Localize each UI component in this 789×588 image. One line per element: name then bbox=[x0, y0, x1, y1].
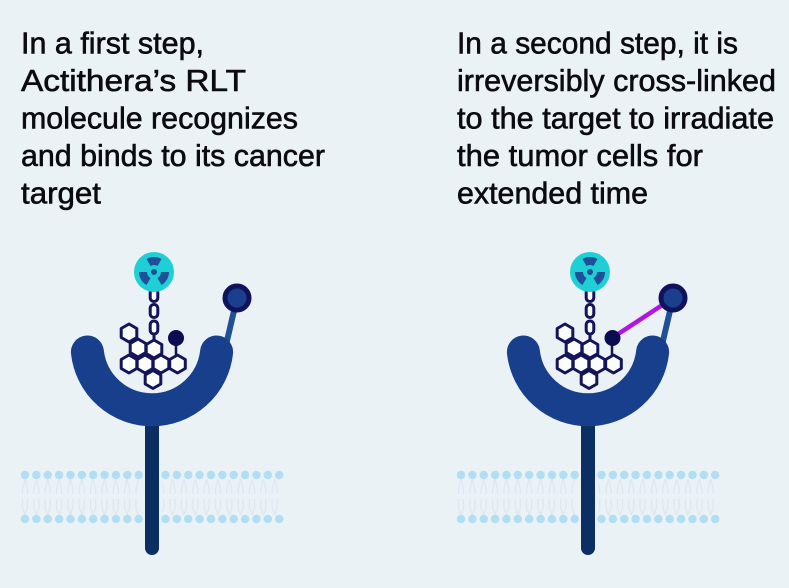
diagram: step two bbox=[457, 252, 718, 555]
hexagon molecule bbox=[121, 324, 185, 388]
cell membrane bbox=[457, 475, 718, 519]
chain bbox=[586, 288, 594, 340]
ligand ball bbox=[168, 330, 184, 355]
receptor arm and knob bbox=[225, 286, 249, 345]
text: first step: molecule recognizes bbox=[21, 100, 298, 136]
text: second step: the tumor cells for bbox=[457, 138, 703, 173]
text: second step: irreversibly cross-linked bbox=[457, 63, 776, 98]
text: first step: and binds to its cancer bbox=[21, 138, 325, 173]
icon: radiation bbox=[570, 252, 610, 292]
receptor cup bbox=[87, 352, 217, 410]
receptor cup bbox=[523, 352, 653, 410]
ligand ball bbox=[604, 330, 620, 355]
text: first step: target bbox=[21, 176, 101, 210]
text: first step bbox=[21, 26, 325, 210]
text: second step: to the target to irradiate bbox=[457, 100, 774, 136]
text: first step: Actithera’s RLT bbox=[21, 63, 246, 98]
diagram: step one bbox=[21, 252, 282, 555]
text: first step: In a first step, bbox=[21, 26, 204, 60]
cell membrane bbox=[21, 475, 282, 519]
receptor arm and knob bbox=[661, 286, 685, 345]
text: second step: In a second step, it is bbox=[457, 26, 738, 60]
hexagon molecule bbox=[557, 324, 621, 388]
text: second step: extended time bbox=[457, 176, 648, 210]
chain bbox=[150, 288, 158, 340]
receptor stem bbox=[145, 420, 159, 555]
icon: radiation bbox=[134, 252, 174, 292]
receptor stem bbox=[581, 420, 595, 555]
cross-link bbox=[612, 298, 673, 338]
text: second step bbox=[457, 26, 776, 210]
